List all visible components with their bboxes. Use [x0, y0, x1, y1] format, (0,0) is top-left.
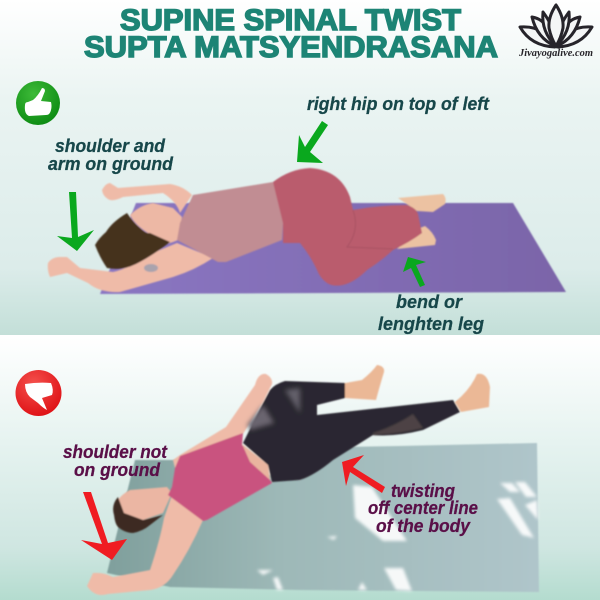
black leggings — [243, 381, 460, 482]
label: shoulder and arm on ground: shoulder and — [55, 136, 166, 156]
label: twisting off center line of the body: off center line — [368, 498, 478, 518]
title — [84, 4, 498, 64]
label: bend or lengthen leg: lenghten leg — [378, 314, 484, 334]
tank top — [177, 182, 283, 262]
skin at waist — [242, 444, 270, 480]
icon: thumbs up badge — [16, 81, 60, 125]
icon: thumbs down badge — [16, 370, 62, 416]
arrow: shoulder not on ground — [81, 492, 127, 560]
label: twisting off center line of the body: of the body — [376, 516, 471, 536]
label: twisting off center line of the body: twisting — [391, 481, 455, 501]
figure: woman in twist, correct — [48, 168, 446, 292]
feet — [340, 365, 384, 400]
label: right hip on top of left: right hip on top of left — [307, 94, 490, 114]
shorts sheen — [247, 405, 274, 430]
pink top — [168, 433, 272, 521]
feet — [398, 194, 446, 212]
hair — [113, 497, 163, 533]
panel: correct pose mat and figure — [48, 168, 566, 294]
label: shoulder not on ground: on ground — [74, 460, 161, 480]
label: shoulder and arm on ground: arm on ground — [48, 154, 174, 174]
label: shoulder and arm on ground — [48, 136, 174, 174]
panel: incorrect pose background — [0, 337, 600, 600]
arrow: leg — [403, 257, 426, 287]
figure: woman in twist, incorrect — [87, 365, 490, 595]
tattoo — [144, 264, 158, 272]
label: bend or lengthen leg: bend or — [396, 292, 463, 312]
leggings — [273, 168, 422, 286]
inner leg shadow — [347, 210, 393, 249]
lower arm — [48, 243, 213, 292]
shorts sheen right — [285, 388, 300, 413]
arrow: twisting off center — [342, 455, 385, 493]
curly hair — [95, 213, 170, 269]
label: shoulder not on ground — [63, 442, 168, 480]
head — [130, 203, 182, 244]
label: twisting off center line of the body — [368, 481, 478, 536]
yoga mat grey-green — [107, 443, 539, 592]
icon: lotus logo — [518, 5, 593, 59]
lower arm — [87, 495, 203, 595]
arrow: shoulder and arm — [57, 192, 94, 251]
panel: incorrect pose mat and figure — [87, 365, 539, 595]
title: SUPTA MATSYENDRASANA — [84, 31, 498, 64]
upper arm — [102, 183, 192, 213]
arrow: right hip — [297, 121, 328, 163]
head — [118, 487, 172, 520]
legging mesh — [373, 414, 423, 435]
yoga mat purple — [100, 203, 566, 294]
label: shoulder not on ground: shoulder not — [63, 442, 168, 462]
panel: correct pose background — [0, 0, 600, 335]
title: SUPINE SPINAL TWIST — [120, 4, 461, 37]
icon: lotus logo: Jivayogalive.com — [518, 48, 593, 59]
mat light patches — [257, 482, 538, 591]
raised arm — [173, 374, 272, 468]
label: bend or lengthen leg — [378, 292, 484, 334]
